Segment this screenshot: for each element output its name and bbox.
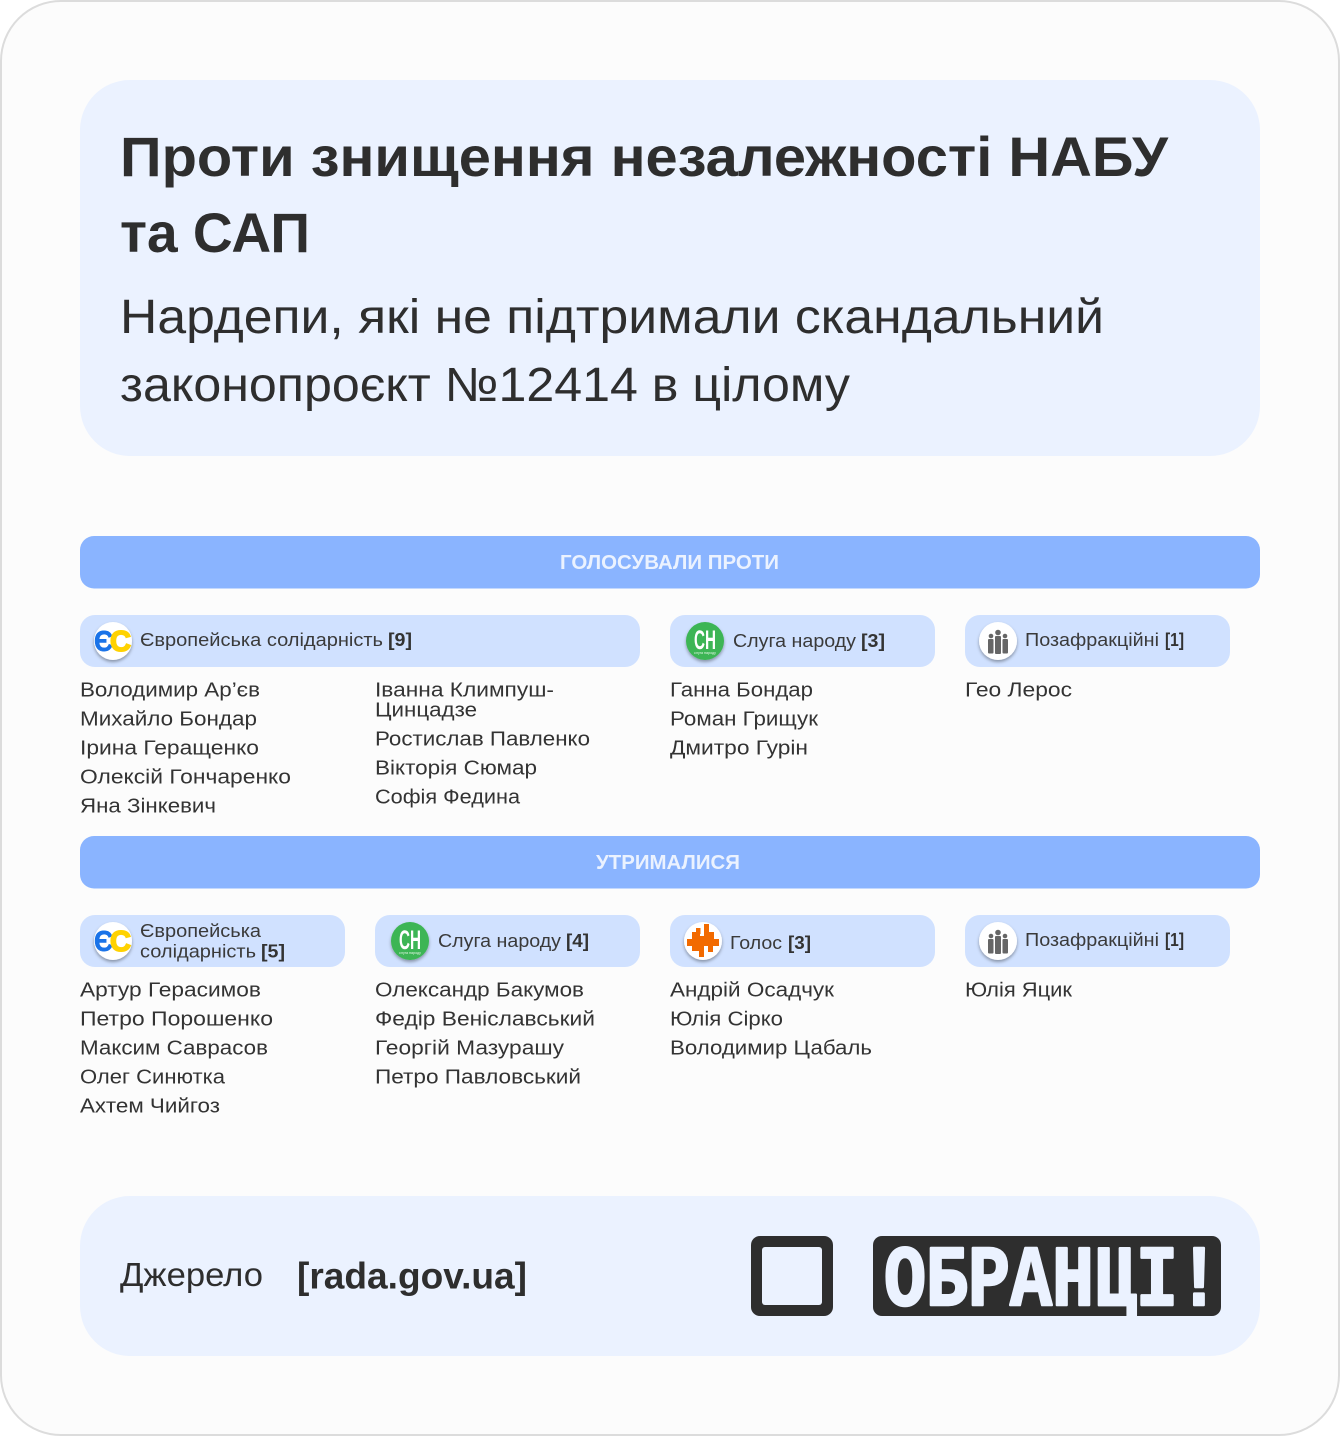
icon: independents group — [979, 622, 1017, 660]
section bar: voted against: ГОЛОСУВАЛИ ПРОТИ — [560, 552, 779, 574]
names: European Solidarity, column 2 — [375, 678, 590, 808]
names: abstained Servant of the People: Петро Павловський — [375, 1066, 581, 1088]
icon: Servant of the People logo: СН — [694, 625, 716, 655]
party pill: European Solidarity 5: солідарність — [140, 942, 256, 962]
names: abstained Servant of the People: Олександр Бакумов — [375, 978, 584, 1002]
party pill: European Solidarity 9 — [80, 615, 640, 667]
icon: European Solidarity logo: Є — [94, 626, 113, 658]
names: abstained Holos: Андрій Осадчук — [670, 978, 835, 1002]
logo: Obrantsi wordmark: ОБРАНЦІ! — [884, 1233, 1220, 1331]
source label: Джерело — [120, 1256, 263, 1293]
icon: European Solidarity logo: Є — [94, 926, 113, 958]
names: abstained Independents: Юлія Яцик — [965, 978, 1073, 1002]
icon: European Solidarity logo: С — [110, 626, 131, 658]
names: abstained European Solidarity: Олег Синютка — [80, 1066, 226, 1088]
names: European Solidarity, column 1 — [80, 678, 291, 818]
names: abstained Servant of the People — [375, 978, 595, 1088]
names: abstained European Solidarity: Петро Порошенко — [80, 1008, 273, 1030]
names: abstained Servant of the People: Георгій Мазурашу — [375, 1036, 565, 1060]
names: European Solidarity, column 2: Софія Федина — [375, 786, 521, 808]
icon: Servant of the People logo — [391, 922, 429, 960]
names: European Solidarity, column 1: Ірина Геращенко — [80, 736, 259, 760]
party pill: Servant of the People 4: Слуга народу — [438, 931, 561, 951]
icon: European Solidarity logo — [94, 922, 132, 960]
names: European Solidarity, column 1: Олексій Гончаренко — [80, 766, 291, 788]
icon: European Solidarity logo: С — [110, 926, 131, 958]
title — [120, 125, 1169, 264]
names: European Solidarity, column 1: Володимир Ар’єв — [80, 678, 260, 702]
names: European Solidarity, column 2: Цинцадзе — [375, 698, 477, 722]
names: European Solidarity, column 1: Яна Зінкевич — [80, 794, 216, 818]
party pill: Holos 3: Голос — [730, 933, 782, 953]
names: abstained Holos: Юлія Сірко — [670, 1008, 783, 1030]
party pill: European Solidarity 9: [9] — [388, 630, 412, 650]
icon: independents group — [979, 922, 1017, 960]
party pill: Independents 1: [1] — [1165, 930, 1184, 950]
icon: Servant of the People logo: слуга народу — [694, 650, 716, 655]
party pill: European Solidarity 5 — [80, 915, 345, 967]
title: та САП — [120, 201, 310, 264]
icon: Holos logo — [684, 922, 722, 960]
names: abstained European Solidarity: Артур Герасимов — [80, 978, 261, 1002]
panel: footer — [80, 1196, 1260, 1356]
party pill: Independents 1: Позафракційні — [1025, 630, 1159, 650]
source link: [rada.gov.ua] — [297, 1256, 527, 1296]
party pill: Servant of the People 4 — [375, 915, 640, 967]
subtitle: Нардепи, які не підтримали скандальний — [120, 291, 1104, 344]
names: Servant of the People: Роман Грищук — [670, 708, 819, 730]
party pill: Independents 1 — [965, 615, 1230, 667]
subtitle: законопроєкт №12414 в цілому — [120, 359, 850, 412]
names: abstained European Solidarity — [80, 978, 273, 1118]
panel: header — [80, 80, 1260, 456]
icon: Servant of the People logo: слуга народу — [399, 950, 421, 955]
party pill: Servant of the People 3: Слуга народу — [733, 631, 856, 651]
title: Проти знищення незалежності НАБУ — [120, 125, 1169, 188]
names: Servant of the People: Ганна Бондар — [670, 678, 813, 702]
party pill: European Solidarity 5: Європейська — [140, 921, 262, 941]
names: abstained European Solidarity: Максим Саврасов — [80, 1036, 268, 1060]
section bar: abstained: УТРИМАЛИСЯ — [596, 852, 740, 874]
party pill: Servant of the People 4: [4] — [566, 931, 589, 951]
icon: Servant of the People logo: СН — [399, 925, 421, 955]
names: European Solidarity, column 1: Михайло Бондар — [80, 708, 257, 730]
names: European Solidarity, column 2: Ростислав Павленко — [375, 728, 590, 750]
party pill: European Solidarity 5: [5] — [261, 942, 285, 962]
section bar: abstained — [80, 836, 1260, 888]
party pill: Holos 3: [3] — [788, 933, 811, 953]
names: abstained Holos: Володимир Цабаль — [670, 1036, 872, 1060]
party pill: Servant of the People 3 — [670, 615, 935, 667]
names: abstained European Solidarity: Ахтем Чийгоз — [80, 1094, 220, 1118]
subtitle — [120, 291, 1104, 412]
icon: Servant of the People logo — [686, 622, 724, 660]
section bar: voted against — [80, 536, 1260, 588]
names: Independents: Гео Лерос — [965, 678, 1072, 702]
party pill: Independents 1: [1] — [1165, 630, 1184, 650]
party pill: Independents 1: Позафракційні — [1025, 930, 1159, 950]
names: European Solidarity, column 2: Вікторія Сюмар — [375, 756, 537, 780]
party pill: Servant of the People 3: [3] — [861, 631, 885, 651]
party pill: Independents 1 — [965, 915, 1230, 967]
icon: logo square — [751, 1236, 833, 1316]
party pill: European Solidarity 9: Європейська солідарність — [140, 630, 383, 650]
names: abstained Holos — [670, 978, 872, 1060]
names: European Solidarity, column 2: Іванна Климпуш- — [375, 678, 554, 702]
icon: European Solidarity logo — [94, 622, 132, 660]
names: Servant of the People — [670, 678, 819, 760]
party pill: Holos 3 — [670, 915, 935, 967]
names: Servant of the People: Дмитро Гурін — [670, 736, 808, 760]
names: abstained Servant of the People: Федір Веніславський — [375, 1008, 595, 1030]
